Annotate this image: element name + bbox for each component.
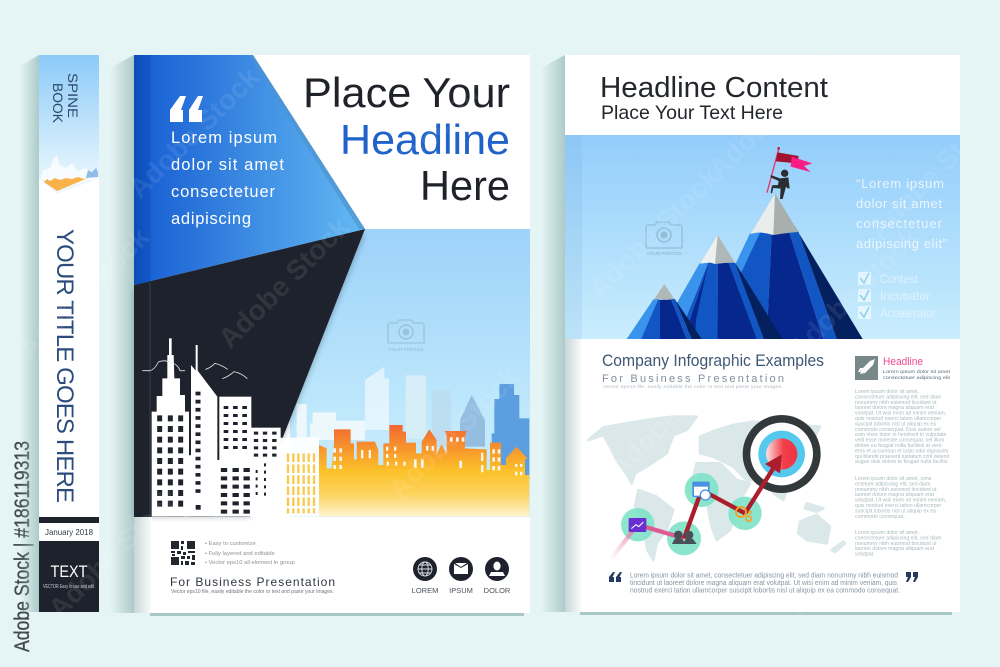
icon: user [484,557,511,595]
watermark: Adobe Stock [782,481,926,624]
icon: envelope: IPSUM [449,586,473,595]
spine dark bar [39,517,99,523]
sidebar text column: qui blandit praesent luptatum zzril delenit [855,454,950,460]
sidebar text column: eros et accumsan et iusto odio dignissim [855,448,948,454]
feature bullets: • Easy to customize [205,541,256,547]
birds [142,361,247,379]
spine footer block: TEXT [50,563,88,581]
bottom quote text: tincidunt ut laoreet dolore magna aliquam erat volutpat. Ut wisi enim ad minim veniam, quis [630,580,897,587]
sidebar text column: suscipit lobortis nisl ut aliquip ex ea [855,421,936,427]
watermark: Adobe Stock [42,481,186,624]
cover title: Here [420,162,510,209]
orange skyline windows [333,437,522,475]
cover title [303,69,510,209]
sidebar text column: nonummy nibh euismod tincidunt ut [855,400,937,406]
photo placeholder icon: YOUR PHOTOS [388,347,424,353]
checklist: Contest [880,272,919,286]
infographic subheading: For Business Presentation [602,373,784,385]
infographic small text: Vector eps10 file, easily editable the color or text and paste your images. [603,384,783,390]
banner quote text [856,176,947,251]
icon: bottom opening quote [609,572,622,582]
sky banner [565,135,960,339]
mountains [627,147,863,339]
icon: globe [412,557,438,595]
icon: people [672,531,697,544]
sidebar text column: ectetuer adipiscing elit, sed diam [855,481,930,487]
banner quote text: consectetuer [856,216,943,231]
sidebar text column: velit esse molestie consequat, vel illum [855,438,944,444]
quote text [171,129,284,228]
spine date: January 2018 [45,527,93,537]
checklist: Accelerator [880,306,936,320]
sidebar text column: commodo consequat. [855,514,905,520]
sidebar text column: dolore eu feugiat nulla facilisis at vero [855,443,942,449]
translucent building with yellow windows [279,438,319,517]
quote text: dolor sit amet [171,156,284,174]
infographic heading: Company Infographic Examples [602,352,824,370]
watermark: Adobe Stock [12,221,156,364]
sidebar text column: laoreet dolore magna aliquam erat [855,405,935,411]
sidebar text column: consectetuer adipiscing elit, sed diam [855,535,941,541]
sidebar text column: commodo consequat. Duis autem vel [855,427,940,433]
cover footer fold [134,517,152,613]
sidebar text column [855,389,950,558]
building A [152,338,189,517]
blue fold shadow [134,234,365,517]
icon: envelope [449,557,473,595]
icon: gears [736,507,751,521]
sidebar text column: laoreet dolore magna aliquam erat [855,492,935,498]
spine footer block: VECTOR Easy to use and edit. [43,584,95,590]
bottom quote text: nostrud exerci tation ullamcorper suscipit lobortis nisl ut aliquip ex ea commodo consequat. [630,588,900,594]
arrow head [765,454,782,473]
photo placeholder icon: YOUR PHOTOS [646,251,682,257]
sidebar text column: quis nostrud exerci tation ullamcorper [855,503,941,509]
sidebar text column: consectetuer adipiscing elit, sed diam [855,394,941,400]
sidebar text column: Lorem ipsum dolor sit amet, [855,389,919,395]
sidebar text column: volutpat. Ut wisi enim ad minim veniam, [855,411,946,417]
feature bullets: • Fully layered and editable [205,551,275,557]
sidebar text column: volutpat. Ut wisi enim ad minim veniam, [855,498,946,504]
footer subtext: Vector eps10 file, easily editable the color or text and paste your images. [171,589,334,595]
icon: calendar and clock [692,482,710,500]
checklist [858,272,936,320]
icon: opening quote [170,96,203,122]
QR code [171,541,195,565]
watermark: Adobe Stock [702,41,846,184]
icon: bottom closing quote [906,572,918,582]
sidebar text column: augue duis dolore te feugait nulla facilisi. [855,459,948,465]
footer heading: For Business Presentation [170,575,335,589]
building D [215,460,278,517]
spine label: BOOK [50,83,66,124]
watermark: Adobe Stock [212,211,356,354]
watermark: Adobe Stock [582,161,726,304]
spine label [50,73,81,124]
spine sky header [39,55,99,194]
sidebar text column: suscipit lobortis nisl ut aliquip ex ea [855,508,936,514]
spine title: YOUR TITLE GOES HERE [51,229,78,503]
page fold [565,339,582,612]
bottom quote text [630,572,900,594]
building B [184,345,217,517]
icon: user: DOLOR [484,586,511,595]
sidebar subheading [883,369,951,381]
spine label: SPINE [65,73,81,118]
sidebar subheading: consectetuer adipiscing elit [883,375,951,381]
panel: book spine [20,55,99,612]
climber [771,170,790,199]
orange skyline [319,425,529,517]
target [743,415,821,493]
chart: target and growth path [610,415,821,560]
sidebar text column: quis nostrud exerci tation ullamcorper [855,416,941,422]
building E [249,428,281,517]
sidebar text column: nonummy nibh euismod tincidunt ut [855,541,937,547]
dark panel [134,229,365,517]
cover title: Headline [340,116,510,163]
feature bullets [205,541,295,566]
world map [588,417,845,560]
panel: front cover [110,55,530,616]
large mountain [700,193,863,339]
sidebar headline: Headline [883,356,923,368]
caption: stock id: Adobe Stock | #186119313 [11,441,34,652]
spine mini city [41,155,98,191]
sidebar icon: rocket [855,356,878,380]
banner quote text: dolor sit amet [856,196,942,211]
watermark: Adobe Stock [122,61,266,204]
path line [610,468,773,560]
sidebar text column: nonummy nibh euismod tincidunt ut [855,487,937,493]
page heading [600,72,828,124]
page heading: Place Your Text Here [601,102,783,124]
spine footer block [39,541,99,612]
panel: inside page [541,55,960,615]
sidebar subheading: Lorem ipsum dolor sit amet [883,369,951,375]
icon: globe: LOREM [412,586,438,595]
watermark: Adobe Stock [782,221,926,364]
cover title: Place Your [303,69,510,116]
photo placeholder icon [388,320,424,353]
feature bullets: • Vector eps10 all element in group [205,560,295,566]
watermark: Adobe Stock [382,361,526,504]
icon: chart screen [629,518,646,532]
quote text: consectetuer [171,183,276,201]
quote text: Lorem ipsum [171,129,277,147]
checklist: Incubator [880,289,930,303]
sidebar text column: volutpat. [855,552,875,558]
sidebar text column: laoreet dolore magna aliquam erat [855,546,935,552]
banner quote text: “Lorem ipsum [856,176,944,191]
flag [767,147,812,193]
sky photo area [290,229,530,517]
photo placeholder icon [646,222,682,257]
watermark: Adobe Stock [372,51,516,194]
small mountain [627,284,702,339]
city illustration [142,338,529,517]
background pale skyline [297,367,529,480]
page heading: Headline Content [600,72,828,104]
middle mountain [650,235,783,339]
blue quote panel [134,55,365,285]
bottom quote text: Lorem ipsum dolor sit amet, consectetuer adipiscing elit, sed diam nonummy nibh euismod [630,572,898,580]
sidebar text column: Lorem ipsum dolor sit amet, [855,530,919,536]
node circles [621,473,762,555]
watermark: Adobe Stock [602,341,746,484]
building C [219,397,251,463]
sidebar text column: eum iriure dolor in hendrerit in vulputate [855,432,947,438]
quote text: adipiscing [171,210,251,228]
banner quote text: adipiscing elit” [856,236,947,251]
sidebar text column: Lorem ipsum dolor sit amet, cons [855,476,932,482]
